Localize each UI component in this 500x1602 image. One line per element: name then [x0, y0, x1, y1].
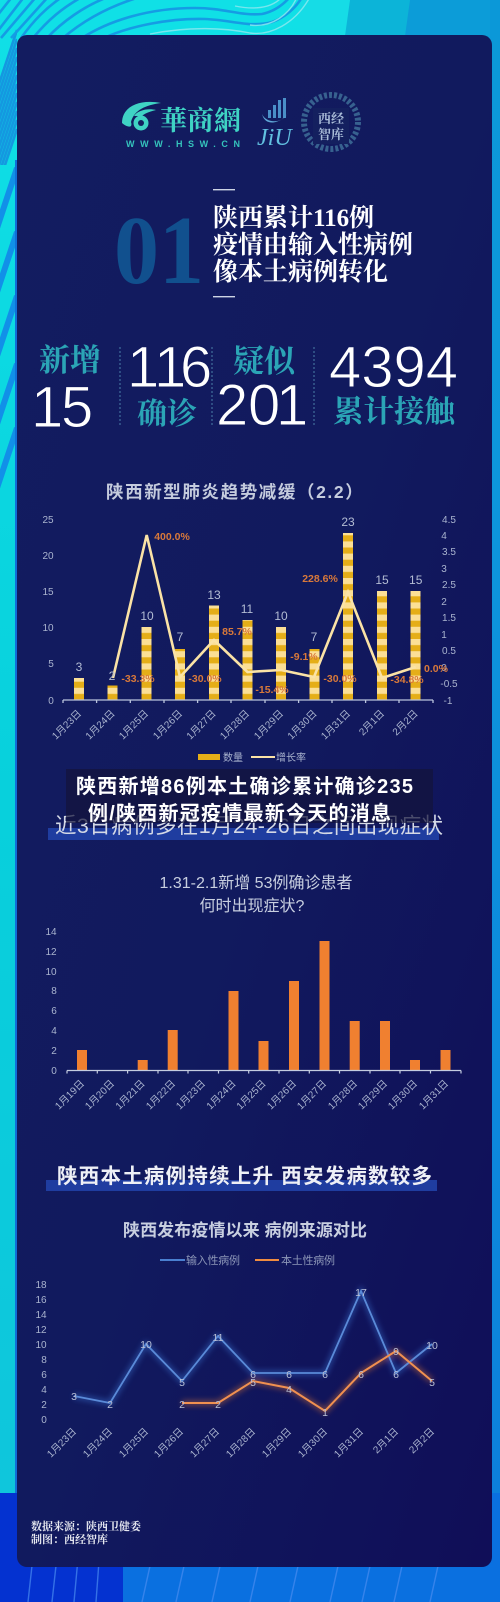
date labels: 1月27日 [295, 1078, 329, 1112]
date labels: 1月31日 [332, 1426, 366, 1460]
stat: suspected: 201 [216, 373, 308, 438]
chart title: trend: 陕西新型肺炎趋势减缓（2.2） [106, 482, 364, 502]
date labels: 1月28日 [218, 708, 252, 742]
bar values: 7 [177, 630, 184, 644]
section heading: symptoms: 近3日病例多在1月24-26日之间出现症状 [55, 814, 443, 838]
left axis: 15 [42, 587, 54, 598]
date labels: 1月21日 [113, 1078, 148, 1112]
bar values: 23 [341, 515, 355, 529]
y axis: 2 [41, 1400, 47, 1411]
growth labels: -33.3% [121, 673, 155, 685]
point labels: 9 [393, 1346, 399, 1358]
right axis: 0.5 [442, 646, 456, 657]
chart title: sources: 陕西发布疫情以来 病例来源对比 [123, 1220, 367, 1240]
bar values: 10 [274, 609, 288, 623]
chart title: onset: 何时出现症状? [200, 897, 305, 915]
growth labels: -34.8% [390, 674, 424, 686]
growth labels: -15.4% [255, 684, 289, 696]
imported line [74, 1291, 432, 1403]
left axis: 25 [42, 515, 54, 526]
bars [77, 941, 450, 1070]
date labels: 1月23日 [174, 1078, 208, 1112]
point labels: 4 [286, 1384, 292, 1396]
bar values: 11 [241, 602, 254, 616]
date labels: 1月23日 [45, 1426, 79, 1460]
growth labels: 228.6% [302, 573, 338, 585]
stat: suspected [216, 344, 308, 438]
stat: confirmed [127, 335, 212, 431]
growth line [113, 535, 416, 678]
axis line [63, 700, 433, 703]
left axis: 10 [42, 623, 54, 634]
left axis: 20 [42, 551, 54, 562]
date labels: 1月26日 [151, 708, 185, 742]
bar values: 10 [140, 609, 154, 623]
date labels: 2月1日 [357, 708, 387, 738]
y axis: 4 [51, 1026, 57, 1037]
chart title: onset: 1.31-2.1新增 53例确诊患者 [160, 874, 352, 892]
y axis: 14 [35, 1310, 47, 1321]
date labels: 1月31日 [319, 708, 353, 742]
right axis [440, 515, 458, 707]
right axis: 2 [441, 597, 447, 608]
bar values [76, 515, 423, 683]
bar values: 2 [109, 669, 116, 683]
date labels: 1月28日 [224, 1426, 258, 1460]
stat: suspected: 疑似 [233, 344, 297, 379]
chart title: onset [160, 874, 352, 915]
point labels: 1 [322, 1407, 328, 1419]
y axis [35, 1280, 47, 1426]
date labels: 1月29日 [356, 1078, 390, 1112]
source note [31, 1519, 142, 1546]
y axis: 16 [35, 1295, 47, 1306]
left axis [42, 515, 54, 707]
legend: 数量 [223, 751, 243, 764]
growth labels: 0.0% [424, 663, 449, 675]
y axis: 12 [45, 947, 57, 958]
date labels: 1月30日 [386, 1078, 420, 1112]
line chart: sources [35, 1280, 438, 1460]
point labels: 6 [250, 1369, 256, 1381]
y axis: 18 [35, 1280, 47, 1291]
headline: 疫情由输入性病例 [213, 230, 413, 259]
point labels: 5 [429, 1377, 435, 1389]
section heading: local cases: 陕西本土病例持续上升 西安发病数较多 [57, 1164, 432, 1188]
left axis: 0 [48, 696, 54, 707]
growth labels: 400.0% [154, 531, 190, 543]
point labels: 11 [213, 1332, 224, 1344]
y axis: 10 [35, 1340, 47, 1351]
date labels: 1月28日 [326, 1078, 360, 1112]
date labels: 1月30日 [296, 1426, 330, 1460]
overlay caption [66, 769, 433, 825]
date labels: 1月25日 [117, 708, 151, 742]
stats row [31, 335, 458, 440]
logo: emblem [304, 95, 358, 149]
overlay caption: 例/陕西新冠疫情最新今天的消息 [88, 801, 391, 825]
y axis: 6 [41, 1370, 47, 1381]
date labels [53, 1078, 451, 1112]
bar values: 7 [311, 630, 318, 644]
headline: 像本土病例转化 [213, 257, 388, 286]
point labels: 6 [358, 1369, 364, 1381]
headline [213, 189, 413, 297]
point labels: 6 [393, 1369, 399, 1381]
right axis: 3 [441, 564, 447, 575]
right axis: 0 [441, 663, 447, 674]
legend: sources: 本土性病例 [281, 1253, 335, 1267]
icon: eye [122, 102, 161, 130]
legend [198, 751, 306, 764]
y axis [45, 927, 57, 1077]
headline: 陕西累计116例 [213, 204, 374, 232]
y axis: 8 [41, 1355, 47, 1366]
stat: confirmed: 确诊 [137, 397, 197, 431]
date labels: 1月24日 [83, 708, 118, 742]
stat: new: 15 [31, 375, 93, 440]
right axis: 1 [441, 630, 447, 641]
date labels: 1月24日 [204, 1078, 239, 1112]
y axis: 10 [45, 967, 57, 978]
point labels: 2 [179, 1399, 185, 1411]
date labels: 1月27日 [184, 708, 219, 742]
logo: emblem: 智库 [318, 127, 344, 142]
date labels: 1月25日 [234, 1078, 269, 1112]
logo: hsw: 華商網 [160, 106, 241, 136]
growth labels: -9.1% [290, 651, 318, 663]
date labels: 1月29日 [260, 1426, 294, 1460]
point labels: 5 [179, 1377, 185, 1389]
logo: JiU: JiU [257, 125, 293, 151]
date labels: 2月2日 [407, 1426, 437, 1456]
logo: hsw: WWW.HSW.CN [126, 139, 240, 149]
y axis: 0 [41, 1415, 47, 1426]
point labels: 5 [250, 1377, 256, 1389]
bar values: 15 [375, 573, 389, 587]
date labels: 1月26日 [265, 1078, 299, 1112]
bar values: 13 [207, 588, 221, 602]
bar values: 3 [76, 660, 83, 674]
growth labels: 85.7% [222, 626, 253, 638]
right axis: 3.5 [442, 547, 456, 558]
y axis: 14 [45, 927, 57, 938]
date labels: 2月2日 [390, 708, 421, 738]
big number 01: 01 [114, 197, 204, 305]
stat: confirmed: 116 [127, 335, 212, 400]
source note: 数据来源：陕西卫健委 [31, 1519, 142, 1533]
bar and line chart: trend [42, 515, 458, 764]
point labels: 2 [107, 1399, 113, 1411]
bar values: 15 [409, 573, 423, 587]
stat: contacts [329, 335, 458, 429]
stat: new: 新增 [39, 343, 101, 378]
point labels: 3 [71, 1391, 77, 1403]
date labels: 1月20日 [83, 1078, 117, 1112]
source note: 制图：西经智库 [31, 1532, 108, 1546]
legend: sources: 输入性病例 [186, 1253, 240, 1267]
date labels: 1月24日 [81, 1426, 115, 1460]
growth labels: -30.0% [188, 673, 222, 685]
right axis: -0.5 [440, 679, 458, 690]
right axis: 4 [441, 531, 447, 542]
growth labels [121, 531, 449, 696]
point labels: 17 [355, 1287, 367, 1299]
glow [74, 1291, 432, 1411]
local line [182, 1351, 432, 1411]
date labels: 1月27日 [188, 1426, 222, 1460]
y axis: 0 [51, 1066, 57, 1077]
legend: 增长率 [276, 751, 306, 764]
stat: contacts: 累计接触 [333, 395, 457, 429]
logo: emblem: 西经 [318, 111, 345, 126]
date labels: 1月31日 [417, 1078, 451, 1112]
y axis: 4 [41, 1385, 47, 1396]
date labels: 1月25日 [117, 1426, 151, 1460]
right axis: -1 [444, 696, 453, 707]
growth labels: -30.0% [323, 673, 357, 685]
point labels: 10 [426, 1340, 438, 1352]
y axis: 12 [35, 1325, 47, 1336]
stat: new [31, 343, 101, 440]
y axis: 8 [51, 986, 57, 997]
date labels [50, 708, 421, 742]
point labels: 6 [322, 1369, 328, 1381]
date labels: 1月19日 [53, 1078, 87, 1112]
point labels: 10 [140, 1339, 152, 1351]
point labels [71, 1287, 438, 1419]
left axis: 5 [48, 659, 54, 670]
date labels: 1月26日 [152, 1426, 186, 1460]
date labels: 1月29日 [252, 708, 286, 742]
right axis: 2.5 [442, 580, 456, 591]
date labels: 1月23日 [50, 708, 84, 742]
legend: sources [160, 1253, 335, 1267]
point labels: 2 [215, 1399, 221, 1411]
logo: JiU [257, 98, 293, 151]
overlay caption: 陕西新增86例本土确诊累计确诊235 [76, 775, 413, 798]
date labels: 1月22日 [144, 1078, 178, 1112]
date labels [45, 1426, 437, 1460]
date labels: 2月1日 [371, 1426, 401, 1456]
striped bars [74, 533, 420, 700]
logo: hsw [122, 102, 241, 149]
stat: contacts: 4394 [329, 335, 458, 400]
point labels: 6 [286, 1369, 292, 1381]
y axis: 2 [51, 1046, 57, 1057]
right axis: 1.5 [442, 613, 456, 624]
bar chart: onset [45, 927, 461, 1112]
right axis: 4.5 [442, 515, 456, 526]
y axis: 6 [51, 1006, 57, 1017]
date labels: 1月30日 [285, 708, 320, 742]
